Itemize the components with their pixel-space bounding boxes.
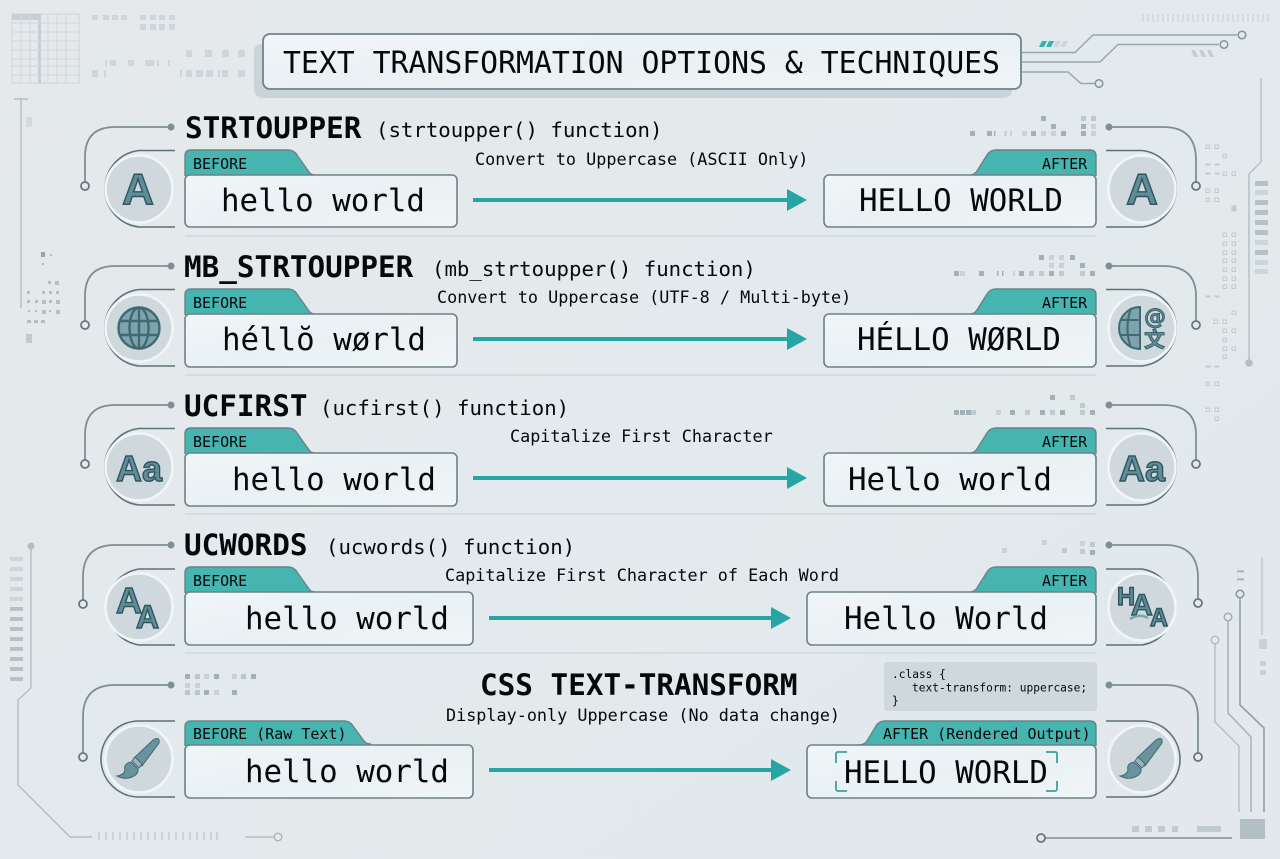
left icon: Aa <box>81 402 175 505</box>
row pixel strips <box>185 116 1096 695</box>
left vertical rail <box>14 99 28 308</box>
top-right ticks <box>1143 14 1268 22</box>
heading: css text-transform: CSS TEXT-TRANSFORM <box>480 668 798 702</box>
after card: mb_strtoupper <box>824 289 1096 367</box>
left lower rail <box>10 542 282 841</box>
after card: ucfirst <box>824 428 1096 506</box>
grid block top-left <box>12 14 79 83</box>
panel: strtoupper <box>81 111 1200 227</box>
arrow <box>473 328 807 350</box>
description: mb_strtoupper: Convert to Uppercase (UTF-8 / Multi-byte) <box>437 287 851 307</box>
code snippet <box>884 662 1097 711</box>
right icon: globe with language glyphs <box>1106 262 1200 366</box>
before card: mb_strtoupper <box>185 289 457 367</box>
arrow <box>473 189 807 211</box>
after card: strtoupper: AFTER <box>1042 155 1088 173</box>
before card: ucwords <box>185 567 473 645</box>
after card: rendered output: HELLO WORLD <box>844 755 1048 791</box>
description: css text-transform: Display-only Uppercase (No data change) <box>446 705 840 725</box>
before card: ucfirst: BEFORE <box>193 433 247 451</box>
title banner <box>254 34 1021 98</box>
title banner: TEXT TRANSFORMATION OPTIONS & TECHNIQUES <box>283 46 1000 81</box>
arrow <box>489 607 791 629</box>
before card: strtoupper: BEFORE <box>193 155 247 173</box>
panel: ucfirst <box>81 389 1200 506</box>
before card: mb_strtoupper: BEFORE <box>193 294 247 312</box>
after card: ucfirst: Hello world <box>848 462 1052 498</box>
code snippet: text-transform: uppercase; <box>912 682 1087 694</box>
right icon: letter A: A <box>1126 165 1158 214</box>
before card: raw text: BEFORE (Raw Text) <box>193 725 347 743</box>
description: strtoupper: Convert to Uppercase (ASCII Only) <box>475 149 808 169</box>
arrow <box>473 467 807 489</box>
heading: ucwords: UCWORDS <box>184 528 307 562</box>
left icon: two capital As: A <box>116 580 142 621</box>
left icon: paintbrush <box>79 682 175 797</box>
heading: ucwords: (ucwords() function) <box>326 535 575 559</box>
description: ucwords: Capitalize First Character of Each Word <box>445 565 839 585</box>
arrow <box>489 759 791 781</box>
after card: ucwords: AFTER <box>1042 572 1088 590</box>
left icon: two capital As <box>79 542 175 645</box>
after card: strtoupper <box>824 150 1096 227</box>
right icon: letter A <box>1106 124 1200 227</box>
code snippet: } <box>892 694 899 708</box>
heading: mb_strtoupper: MB_STRTOUPPER <box>184 250 414 284</box>
right outlined squares <box>1206 145 1236 420</box>
right icon: paintbrush <box>1106 682 1202 797</box>
right icon: H A A <box>1106 542 1202 645</box>
after card: mb_strtoupper: AFTER <box>1042 294 1088 312</box>
right icon: globe with language glyphs: 文 <box>1144 324 1165 354</box>
before card: mb_strtoupper: héllŏ wørld <box>222 322 426 358</box>
description: ucfirst: Capitalize First Character <box>510 426 773 446</box>
panel: ucwords <box>79 528 1202 645</box>
title circuit traces <box>1022 31 1246 87</box>
left dots <box>26 252 60 343</box>
heading: ucfirst: UCFIRST <box>184 389 307 423</box>
before card: strtoupper: hello world <box>221 183 425 219</box>
pixel blocks top-left <box>92 15 245 77</box>
after card: rendered output: AFTER (Rendered Output) <box>883 725 1091 743</box>
code snippet: .class { <box>892 668 946 681</box>
after card: ucfirst: AFTER <box>1042 433 1088 451</box>
before card: strtoupper <box>185 150 457 227</box>
right icon: globe with language glyphs: @ <box>1144 305 1166 330</box>
after card: ucwords: Hello World <box>844 601 1048 637</box>
before card: ucwords: BEFORE <box>193 572 247 590</box>
before card: ucwords: hello world <box>245 601 449 637</box>
left icon: Aa: Aa <box>116 448 163 489</box>
before card: raw text <box>185 721 473 798</box>
heading: strtoupper: (strtoupper() function) <box>376 118 662 142</box>
left icon: letter A: A <box>122 165 154 214</box>
after card: strtoupper: HELLO WORLD <box>859 183 1063 219</box>
heading: mb_strtoupper: (mb_strtoupper() function) <box>432 257 756 281</box>
right icon: Aa: Aa <box>1119 448 1166 489</box>
panel: mb_strtoupper <box>81 250 1200 367</box>
left icon: letter A <box>81 124 175 227</box>
before card: raw text: hello world <box>245 754 449 790</box>
lower-right traces <box>1037 557 1267 842</box>
after card: mb_strtoupper: HÉLLO WØRLD <box>857 322 1061 358</box>
right icon: H A A: H <box>1117 583 1135 611</box>
before card: ucfirst <box>185 428 457 506</box>
before card: ucfirst: hello world <box>232 462 436 498</box>
right icon: Aa <box>1106 402 1200 505</box>
left icon: globe <box>81 262 175 366</box>
panel: css text-transform <box>79 662 1202 798</box>
heading: strtoupper: STRTOUPPER <box>185 111 362 145</box>
right icon: H A A: A <box>1131 589 1153 622</box>
right icon: H A A: A <box>1150 604 1168 632</box>
right rail with bars <box>1245 78 1268 367</box>
after card: rendered output <box>807 721 1096 798</box>
heading: ucfirst: (ucfirst() function) <box>320 396 569 420</box>
after card: ucwords <box>807 567 1096 645</box>
left icon: two capital As: A <box>136 599 159 635</box>
